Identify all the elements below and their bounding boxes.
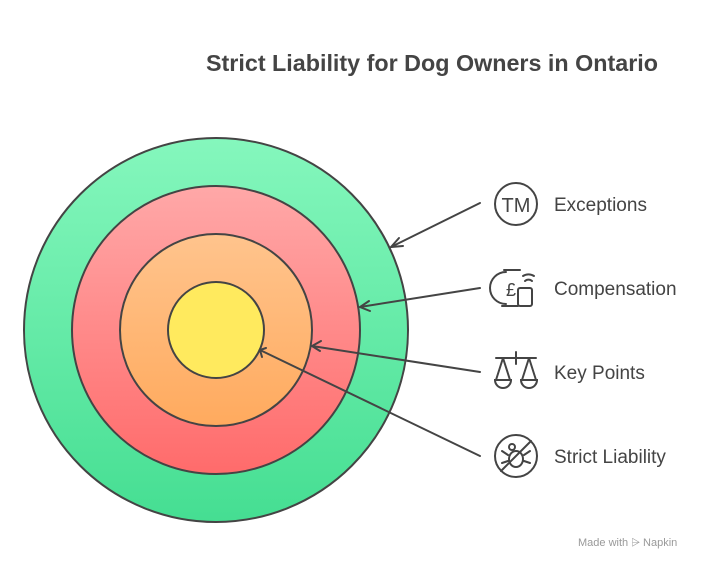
title: Strict Liability for Dog Owners in Ontario — [206, 50, 658, 76]
labels: Key Points — [554, 363, 645, 384]
concentric circles diagram — [24, 138, 408, 522]
labels: Strict Liability — [554, 447, 666, 468]
icon: trademark — [495, 183, 537, 225]
labels — [554, 195, 677, 468]
labels: Exceptions — [554, 195, 647, 216]
arrows — [260, 203, 480, 456]
footer credit: Made with ⩥ Napkin — [578, 537, 677, 549]
icon: trademark: TM — [502, 195, 530, 217]
icon: compensation — [490, 270, 534, 306]
icon: compensation: £ — [506, 280, 516, 300]
icon: scales — [495, 352, 537, 388]
labels: Compensation — [554, 279, 677, 300]
icon: no bug — [495, 435, 537, 477]
